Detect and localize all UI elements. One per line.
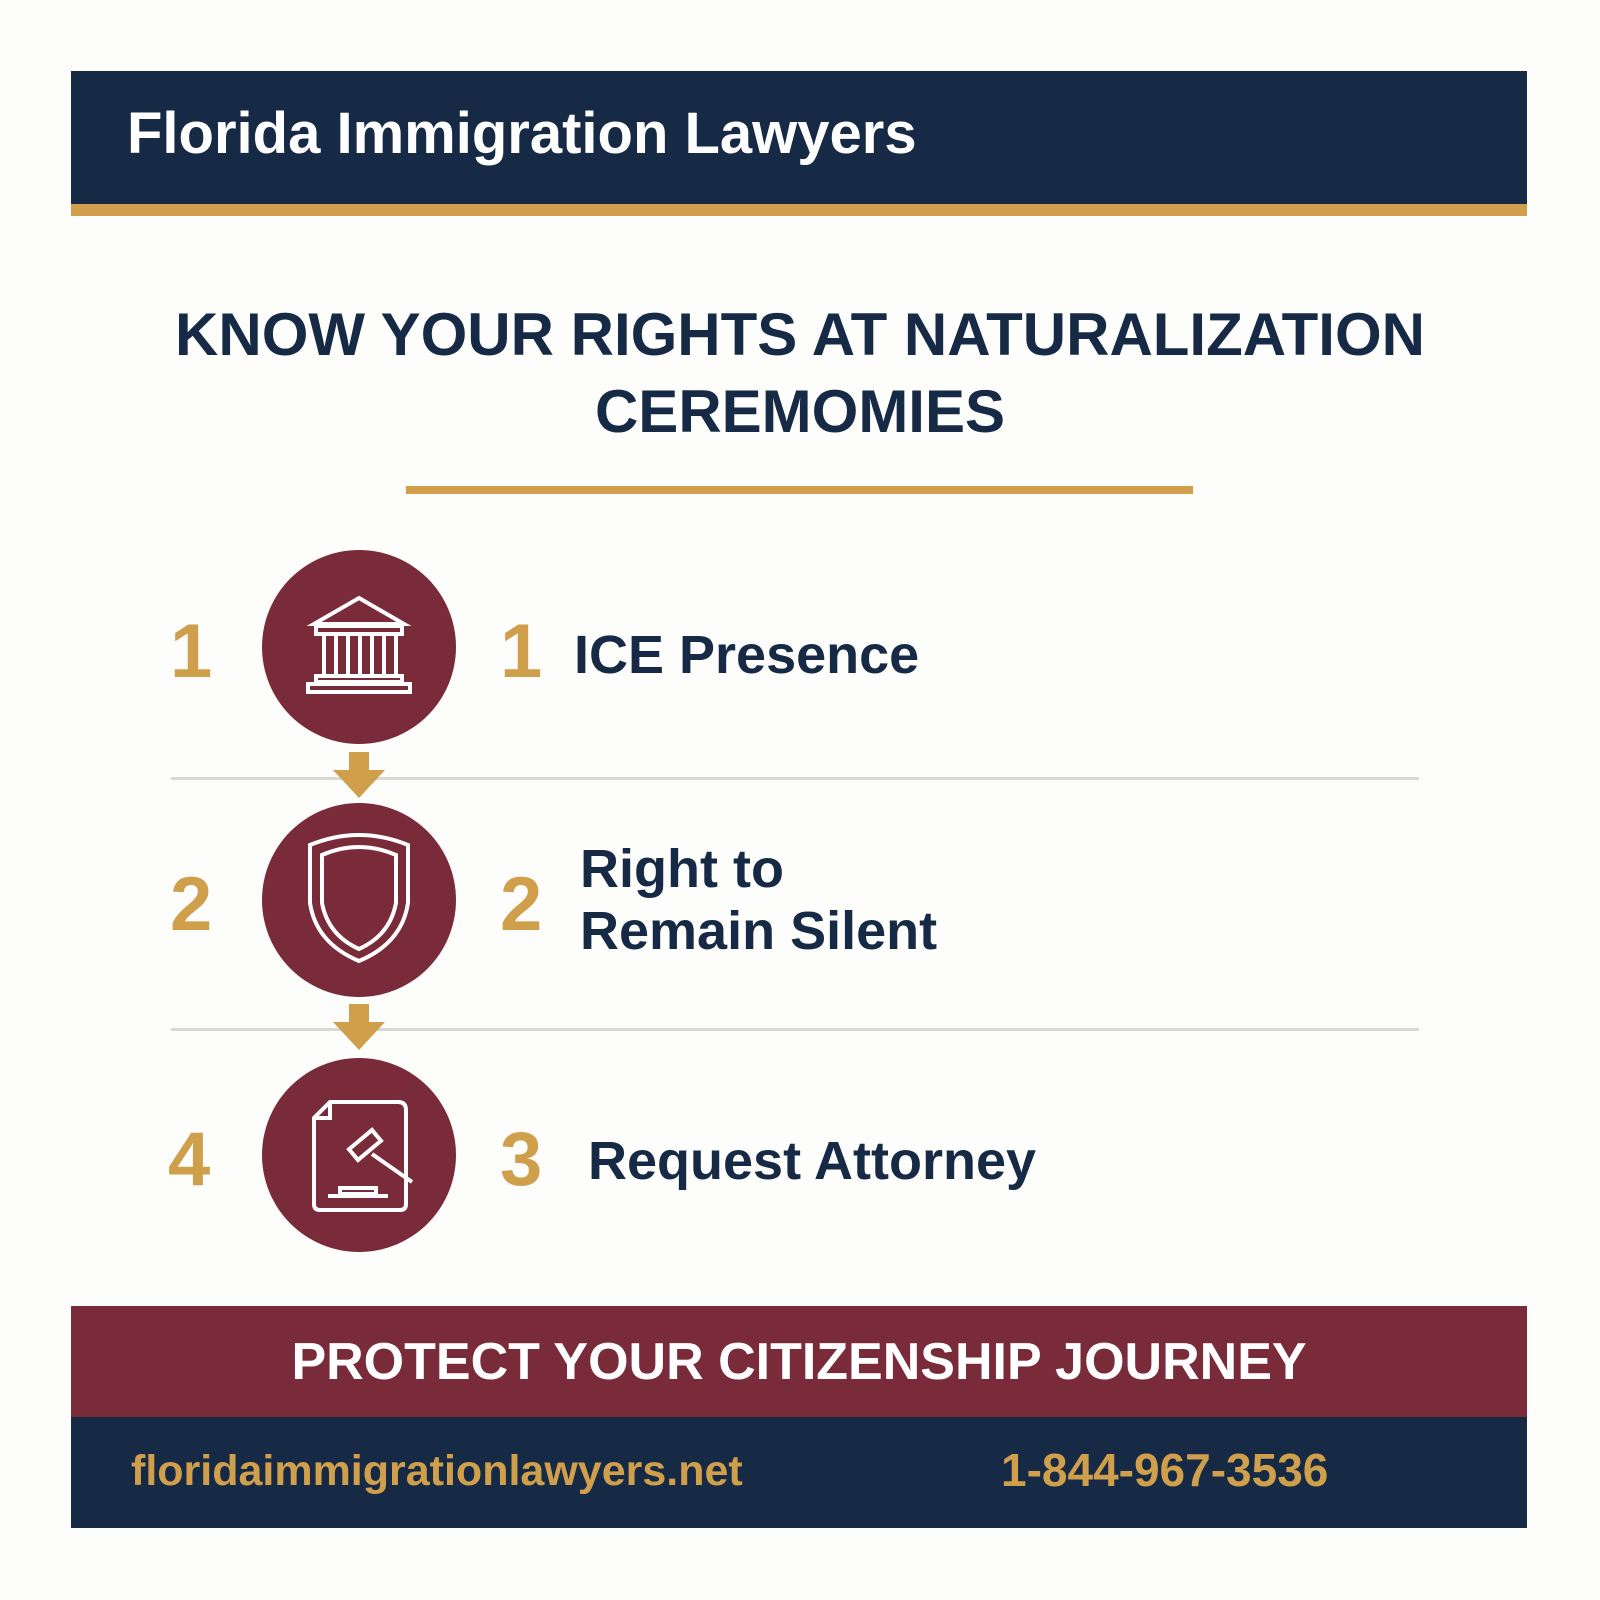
number left 1: 1 [170,609,212,694]
footer slogan: PROTECT YOUR CITIZENSHIP JOURNEY [291,1333,1307,1391]
phone: 1-844-967-3536 [1001,1444,1328,1496]
step 2 [170,803,937,997]
number right 1: 1 [500,609,542,694]
label: Right to Remain Silent [580,839,937,961]
step 3 [168,1058,1036,1252]
website: floridaimmigrationlawyers.net [131,1447,743,1495]
number left 4: 4 [168,1117,210,1202]
header bar [71,71,1527,216]
contact bar [71,1417,1527,1528]
label: Request Attorney: Request Attorney [588,1131,1036,1191]
title underline [406,486,1193,494]
main title: KNOW YOUR RIGHTS AT NATURALIZATION [175,301,1425,368]
separators [171,777,1419,780]
arrow 2 [333,1004,385,1050]
header title: Florida Immigration Lawyers [127,101,917,166]
step 1 [170,550,919,744]
label: Right to Remain Silent: Right to [580,839,784,899]
footer banner [71,1306,1527,1417]
number right 2: 2 [500,862,542,947]
number right 3: 3 [500,1117,542,1202]
label: ICE Presence: ICE Presence [574,625,919,685]
label: Right to Remain Silent: Remain Silent [580,901,937,961]
main title: CEREMOMIES [595,378,1005,445]
arrow 1 [333,752,385,798]
icon: courthouse [262,550,456,744]
icon: document with gavel [262,1058,456,1252]
main title [175,301,1425,445]
number left 2: 2 [170,862,212,947]
icon: shield [262,803,456,997]
